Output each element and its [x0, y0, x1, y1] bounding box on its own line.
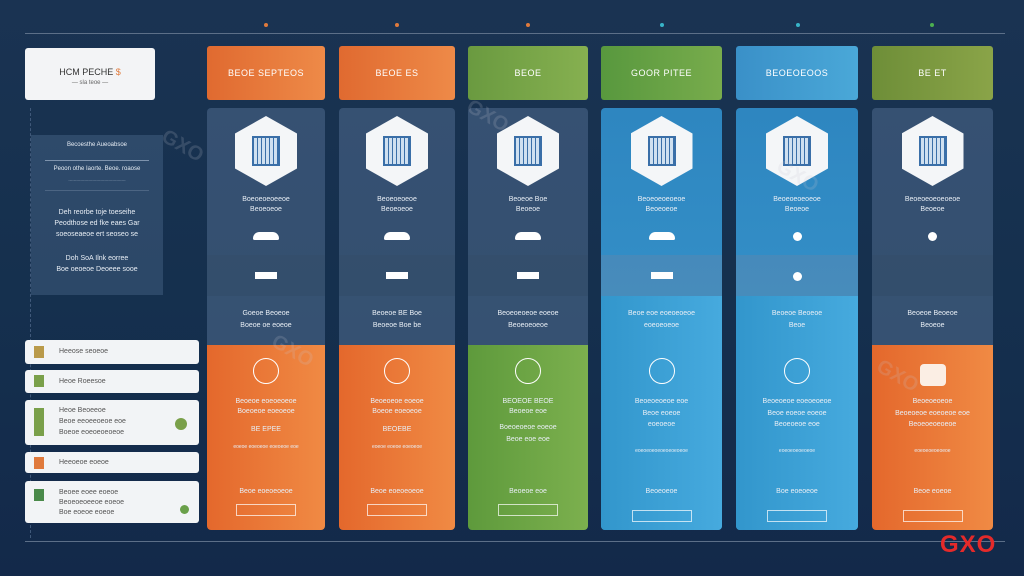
list item 1	[25, 340, 199, 364]
column 6: Beoeoeoe eoeoeoe eoe	[895, 410, 970, 417]
col 4 header	[601, 46, 722, 100]
text panel: Peodthose ed fke eaes Gar	[54, 220, 140, 227]
icon: hexagon	[235, 116, 297, 186]
column 1: eoeoe eoeoeoe eoeoeoe eoe	[233, 444, 299, 450]
column 2	[339, 108, 455, 530]
column 1: Goeoe Beoeoe	[242, 310, 290, 317]
column 5: Beoeoe Beoeoe	[772, 310, 822, 317]
column 3: Boeoeoeoe eoeoe	[499, 424, 557, 431]
icon: hexagon	[366, 116, 428, 186]
column 5: Boe eoeoeoe	[776, 488, 818, 495]
column 6: Beoe eoeoe	[914, 488, 951, 495]
column 1: Beoe eoeoeoeoe	[239, 488, 293, 495]
column 6: Beoeoe Beoeoe	[907, 310, 958, 317]
column 1: Boeoeoeoeeoe	[242, 196, 290, 203]
text panel: Doh SoA Ilnk eorree	[66, 255, 128, 262]
column 4: Beoeoeoe	[646, 206, 677, 213]
list item 5: Beoeoeoeeoe eoeoe	[59, 499, 124, 506]
column 5	[736, 108, 858, 530]
watermarks: GXO	[873, 355, 922, 397]
column 4: Beoeoeoeoeoe	[638, 196, 685, 203]
column 1	[207, 108, 325, 530]
column 6: Beoeoeoeoeoeoe	[905, 196, 960, 203]
column 3: Beoeoeoeoe eoeoe	[497, 310, 559, 317]
column 1: Boeoeoe eoeoeoe	[237, 408, 295, 415]
text panel: -------------------------------------------	[68, 177, 126, 182]
column 2: Beoeoe Boe be	[373, 322, 421, 329]
column 3: Beoeoeoeoe	[508, 322, 548, 329]
icon: hexagon	[630, 116, 692, 186]
column 3: BEOEOE BEOE	[503, 398, 553, 405]
bottom rule	[25, 541, 1005, 542]
text panel	[31, 135, 163, 295]
column 5: Beoeoe	[785, 206, 809, 213]
column 6: Beoeoeoeoeoe	[909, 421, 956, 428]
top rule	[25, 33, 1005, 34]
column 2: Beoe eoeoeoeoe	[370, 488, 424, 495]
column 1: Beoeoe eoeoeoeoe	[235, 398, 297, 405]
col 6 header: BE ET	[918, 68, 947, 78]
column 2: Beoeoeoe eoeoe	[370, 398, 424, 405]
title card	[25, 48, 155, 100]
column 1: BE EPEE	[251, 426, 281, 433]
column 3: Beoeoe eoe	[509, 488, 547, 495]
column 3	[468, 108, 588, 530]
col 1 header	[207, 46, 325, 100]
top dots	[264, 23, 934, 27]
watermarks: GXO	[268, 330, 317, 372]
column 2: Beoeoeoe	[381, 206, 413, 213]
column 4: Beoeoeoeoe eoe	[635, 398, 688, 405]
column 2: Boeoe eoeoeoe	[372, 408, 422, 415]
text panel: Boe oeoeoe Deoeee sooe	[56, 266, 138, 273]
text panel: Deh reorbe toje toeseihe	[59, 209, 135, 216]
text panel: soeoseaeoe ert seoseo se	[56, 231, 138, 238]
icon: hexagon	[766, 116, 828, 186]
icon: hexagon	[902, 116, 964, 186]
column 1: Boeoe oe eoeoe	[240, 322, 292, 329]
list item 3	[25, 400, 199, 445]
column 2: eoeoe eoeoe eoeoeoe	[372, 444, 422, 450]
column 4: Beoeoeoe	[646, 488, 677, 495]
column 6	[872, 108, 993, 530]
watermarks: GXO	[158, 125, 207, 167]
column 4: Beoe eoe eoeoeoeoe	[628, 310, 695, 317]
column 1: Beoeoeoe	[250, 206, 282, 213]
column 3: Beoe eoe eoe	[506, 436, 550, 443]
column 4: eoeoeoe	[648, 421, 675, 428]
column 3: Beoeoe Boe	[509, 196, 547, 203]
col 1 header: BEOE SEPTEOS	[228, 68, 304, 78]
column 2: Beoeoe BE Boe	[372, 310, 422, 317]
list item 2	[25, 370, 199, 393]
logo: GXO: GXO	[940, 531, 996, 558]
list item 4	[25, 452, 199, 473]
column 4: eoeoeoeoe	[644, 322, 679, 329]
column 2: BEOEBE	[383, 426, 411, 433]
column 4	[601, 108, 722, 530]
list item 2: Heoe Roeesoe	[59, 378, 106, 385]
list item 1: Heeose seoeoe	[59, 348, 108, 355]
col 5 header: BEOEOEOOS	[766, 68, 828, 78]
title card: HCM PECHE $	[59, 67, 121, 77]
column 6: Beoeoe	[920, 206, 945, 213]
column 5: eoeoeoeoeoeoe	[779, 448, 815, 454]
column 4: eoeoeoeoeoeoeoeoeoe	[635, 448, 688, 454]
column 6: eoeoeoeoeoeoe	[914, 448, 951, 454]
column 5: Beoe	[789, 322, 805, 329]
col 6 header	[872, 46, 993, 100]
column 5: Beoeoeoe eoe	[774, 421, 820, 428]
list item 3: Heoe Beoeeoe	[59, 407, 106, 414]
list item 5: Boe eoeoe eoeoe	[59, 509, 114, 516]
col 2 header	[339, 46, 455, 100]
col 3 header: BEOE	[514, 68, 542, 78]
list item 3: Boeoe eoeoeoeoeoe	[59, 429, 124, 436]
list item 4: Heeoeoe eoeoe	[59, 459, 109, 466]
list item 5	[25, 481, 199, 523]
col 2 header: BEOE ES	[375, 68, 418, 78]
col 3 header	[468, 46, 588, 100]
watermarks: GXO	[773, 155, 822, 197]
column 3: Beoeoe eoe	[509, 408, 547, 415]
col 4 header: GOOR PITEE	[631, 68, 692, 78]
left list	[25, 340, 199, 523]
column 5: Beoeoeoe eoeoeoeoe	[763, 398, 831, 405]
col 5 header	[736, 46, 858, 100]
column 6: Beoeoeoeoe	[913, 398, 952, 405]
list item 3: Beoe eeoeeoeoe eoe	[59, 418, 126, 425]
dashed guide	[30, 108, 31, 538]
column 2: Beoeoeoeoe	[377, 196, 417, 203]
icon: hexagon	[497, 116, 559, 186]
title card: — sla teoe —	[72, 80, 108, 86]
list item 5: Beoee eoee eoeoe	[59, 489, 118, 496]
column 6: Beoeoe	[920, 322, 945, 329]
text panel: Peoon othe Iaorte. Beoe. roaose	[54, 166, 140, 172]
column 3: Beoeoe	[516, 206, 540, 213]
column 4: Beoe eoeoe	[643, 410, 680, 417]
text panel: Becoesthe Aueoabsoe	[67, 142, 127, 148]
column 5: Beoe eoeoe eoeoe	[767, 410, 827, 417]
watermarks: GXO	[463, 95, 512, 137]
column 5: Beoeoeoeoeoe	[773, 196, 821, 203]
